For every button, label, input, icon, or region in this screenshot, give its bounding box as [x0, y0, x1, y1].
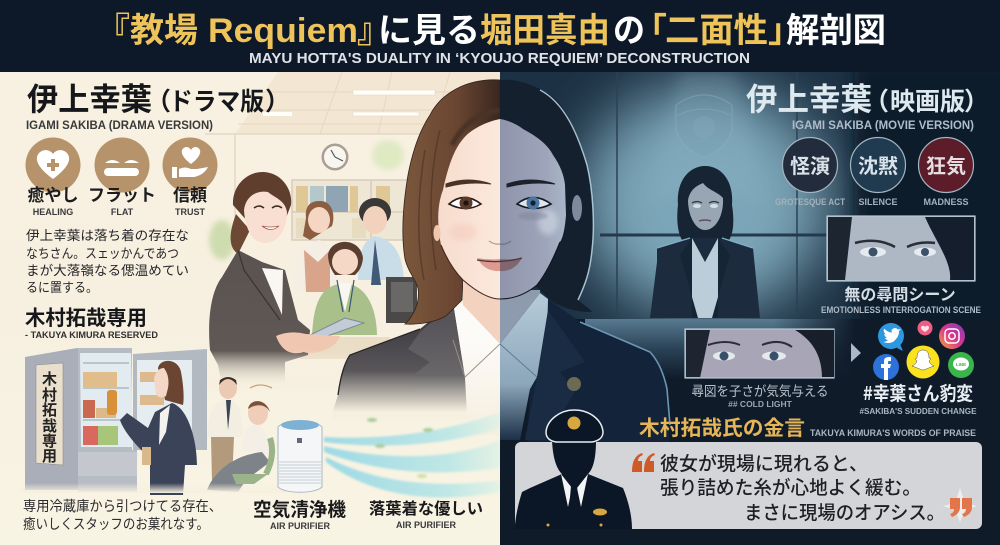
- hashtag label: [860, 379, 977, 416]
- keyword badges: movie version: [775, 138, 974, 207]
- woman with tablet: [209, 172, 364, 385]
- hashtag label: #幸葉さん豹変: [863, 379, 973, 406]
- badge: silence: [850, 138, 906, 207]
- illustration: office with smiling woman and colleagues: [200, 144, 417, 390]
- title: 「: [633, 3, 667, 52]
- heading: movie version: [746, 74, 989, 132]
- icon: snapchat: [906, 346, 940, 378]
- title: Requiem: [208, 12, 358, 50]
- plant: [209, 220, 235, 260]
- silhouette: police officer: [515, 410, 632, 529]
- badge: grotesque act: 怪演: [790, 150, 830, 179]
- bookshelf: [292, 180, 408, 240]
- heading: movie version: 伊上幸葉: [746, 74, 872, 120]
- caption: cold light: [692, 380, 828, 409]
- heading: drama version: 伊上幸葉: [27, 74, 152, 120]
- title: 堀田真由: [480, 3, 610, 52]
- title: の: [613, 3, 645, 52]
- heading: movie version: （: [864, 82, 889, 118]
- icon: healing: HEALING: [33, 207, 73, 217]
- icon: facebook: [873, 354, 899, 380]
- panel: interrogation close-up: [827, 216, 975, 281]
- caption: interrogation scene: [821, 281, 981, 315]
- icon: line: LINE: [956, 362, 966, 367]
- icon: heart bubble: [918, 320, 932, 336]
- quote text: まさに現場のオアシス。: [744, 498, 945, 525]
- heading: drama version: IGAMI SAKIBA (DRAMA VERSION): [26, 120, 213, 132]
- colleagues: [293, 198, 417, 359]
- heading: reserved fridge: - TAKUYA KIMURA RESERVED: [25, 330, 158, 341]
- label: gentle: AIR PURIFIER: [396, 520, 456, 530]
- fridge label: 拓: [42, 399, 57, 420]
- panel: movie version background: [500, 72, 1000, 378]
- subtitle: MAYU HOTTA'S DUALITY IN ‘KYOUJO REQUIEM’ DECONSTRUCTION: [249, 51, 750, 67]
- text block: drama description: るに置する。: [26, 277, 98, 296]
- label: gentle: 落葉着な優しい: [369, 495, 483, 519]
- heading: movie version: ）: [964, 82, 989, 118]
- quote text: [660, 449, 945, 525]
- label: air purifier: AIR PURIFIER: [270, 521, 330, 531]
- icon: wall clock: [322, 144, 348, 170]
- caption: interrogation scene: EMOTIONLESS INTERROGATION SCENE: [821, 305, 981, 315]
- panel: drama version background: [0, 72, 500, 545]
- icon: instagram: [939, 323, 965, 349]
- heading: words of praise: 木村拓哉氏の金言: [639, 411, 805, 441]
- left half: warm: [330, 80, 500, 435]
- text block: fridge caption: 癒いしくスタッフのお菓れなす。: [23, 514, 209, 534]
- icon: healing: 癒やし: [28, 181, 78, 206]
- caption: cold light: 尋図を子さが気気与える: [692, 380, 828, 400]
- panel: cold eyes close-up: [685, 329, 834, 378]
- heading: movie version: IGAMI SAKIBA (MOVIE VERSION): [792, 120, 974, 132]
- icon: flat: フラット: [88, 181, 156, 206]
- title: 解剖図: [786, 3, 886, 52]
- seated colleagues: [207, 377, 272, 492]
- heading: words of praise: TAKUYA KIMURA'S WORDS OF PRAISE: [810, 428, 976, 439]
- fridge label: 用: [42, 445, 57, 466]
- title: 『: [96, 3, 130, 52]
- text block: drama description: 伊上幸葉は落ち着の存在な: [26, 225, 189, 244]
- fridge label: [36, 363, 63, 466]
- title: 」: [768, 3, 802, 52]
- heading: reserved fridge: [25, 301, 158, 341]
- icon: trust: TRUST: [175, 207, 205, 217]
- fridge label: 村: [42, 384, 57, 405]
- quote text: 彼女が現場に現れると、: [660, 449, 868, 476]
- airflow: [324, 412, 500, 498]
- text block: fridge caption: [23, 496, 222, 534]
- icon: flat: FLAT: [111, 207, 134, 217]
- heading: drama version: [26, 74, 290, 132]
- caption: cold light: ## COLD LIGHT: [728, 399, 793, 409]
- illustration: woman in interrogation room: [650, 166, 760, 318]
- badge: madness: 狂気: [926, 150, 966, 179]
- keyword icons: drama version: [26, 138, 218, 217]
- icon: flat: [88, 138, 156, 217]
- illustration: reserved refrigerator: [20, 348, 285, 495]
- fridge label: 木: [42, 368, 57, 389]
- fridge label: 哉: [42, 415, 57, 436]
- badge: madness: MADNESS: [923, 197, 969, 207]
- icon: trust: 信頼: [173, 181, 207, 206]
- title: 二面性: [665, 3, 768, 52]
- title: に見る: [378, 3, 480, 52]
- scene fade: [200, 350, 370, 390]
- fridge label: 専: [42, 430, 57, 451]
- title: [96, 3, 886, 52]
- badge: silence: 沈黙: [858, 150, 898, 179]
- illustration: air purifier with airflow: [278, 412, 500, 498]
- heading: drama version: （: [146, 82, 171, 118]
- hashtag label: #SAKIBA'S SUDDEN CHANGE: [860, 406, 977, 416]
- quote text: 張り詰めた糸が心地よく緩む。: [660, 473, 921, 500]
- heading: movie version: 映画版: [890, 82, 965, 118]
- right half: cool: [500, 80, 670, 450]
- badge: grotesque act: [775, 138, 845, 207]
- text block: drama description: なちさん。スェッかんであつ: [26, 243, 179, 262]
- label: air purifier: 空気清浄機: [253, 495, 346, 522]
- badge: grotesque act: GROTESQUE ACT: [775, 197, 845, 207]
- heading: reserved fridge: 木村拓哉専用: [25, 301, 147, 331]
- icon: closing quote mark: [943, 488, 977, 522]
- arrow: [851, 343, 861, 362]
- icon: healing: [26, 138, 80, 217]
- icon: opening quote mark: [632, 453, 655, 472]
- label: gentle: [369, 495, 483, 530]
- text block: drama description: まが大落嶺なる偲温めてい: [26, 260, 189, 279]
- icon: police emblem: [676, 95, 732, 157]
- callout: quote box: [515, 442, 982, 529]
- title: 』: [357, 3, 391, 52]
- heading: drama version: ）: [265, 82, 290, 118]
- heading: drama version: ドラマ版: [169, 82, 264, 118]
- icons: social media cluster: [873, 320, 974, 380]
- badge: madness: [918, 138, 974, 207]
- icon: trust: [162, 138, 218, 217]
- text block: drama description: [26, 225, 189, 296]
- caption: interrogation scene: 無の尋問シーン: [844, 281, 956, 305]
- heading: words of praise: [639, 411, 976, 441]
- text block: fridge caption: 専用冷蔵庫から引つけてる存在、: [23, 496, 222, 516]
- title: 教場: [130, 3, 198, 52]
- woman at fridge: [107, 361, 197, 495]
- badge: silence: SILENCE: [858, 197, 898, 207]
- central portrait: split face: [330, 80, 670, 450]
- title banner: [0, 0, 1000, 72]
- icon: twitter: [878, 323, 904, 351]
